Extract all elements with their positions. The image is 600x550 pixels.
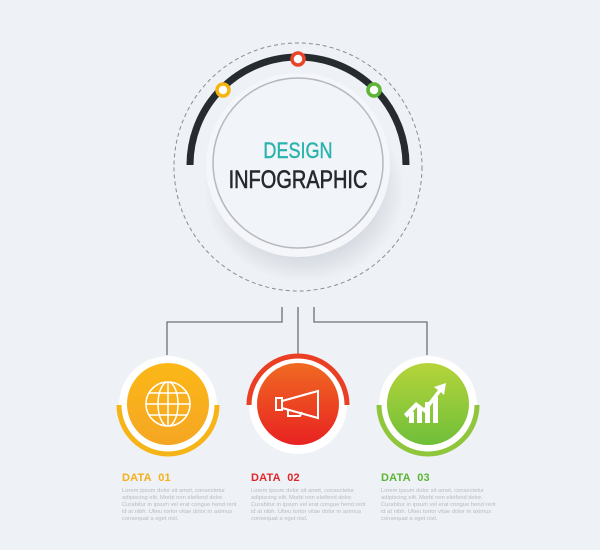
text block 3: DATA 03: [381, 472, 430, 484]
text block 3: Lorem ipsum dolor sit amet, consectetur adipiscing elit. Morbi non eleifend dolor. Curabitur in ipsum vel erat congue hend rerit id at nibh. Ulteu tortor vitae dolor m aximus consequat a eget nisl.: [381, 488, 495, 522]
text block 1: Lorem ipsum dolor sit amet, consectetur adipiscing elit. Morbi non eleifend dolor. Curabitur in ipsum vel erat congue hend rerit id at nibh. Ulteu tortor vitae dolor m aximus consequat a eget nisl.: [122, 488, 236, 522]
text block 1: [122, 472, 236, 522]
text block 1: DATA 01: [122, 472, 171, 484]
arc dots: [217, 53, 380, 96]
text block 2: [251, 472, 366, 522]
circle 2: [249, 356, 347, 454]
dark arc: [190, 57, 406, 165]
text block 2: DATA 02: [251, 472, 300, 484]
central circle: [204, 73, 404, 282]
circle 3: [379, 356, 477, 454]
title: [229, 139, 367, 194]
connectors: [167, 307, 427, 355]
circle 1: [119, 356, 217, 454]
text block 3: [381, 472, 496, 522]
dashed outer ring: [174, 43, 422, 291]
text block 2: Lorem ipsum dolor sit amet, consectetur adipiscing elit. Morbi non eleifend dolor. Curabitur in ipsum vel erat congue hend rerit id at nibh. Ulteu tortor vitae dolor m aximus consequat a eget nisl.: [251, 488, 365, 522]
title: INFOGRAPHIC: [229, 166, 367, 194]
title: DESIGN: [263, 139, 333, 163]
